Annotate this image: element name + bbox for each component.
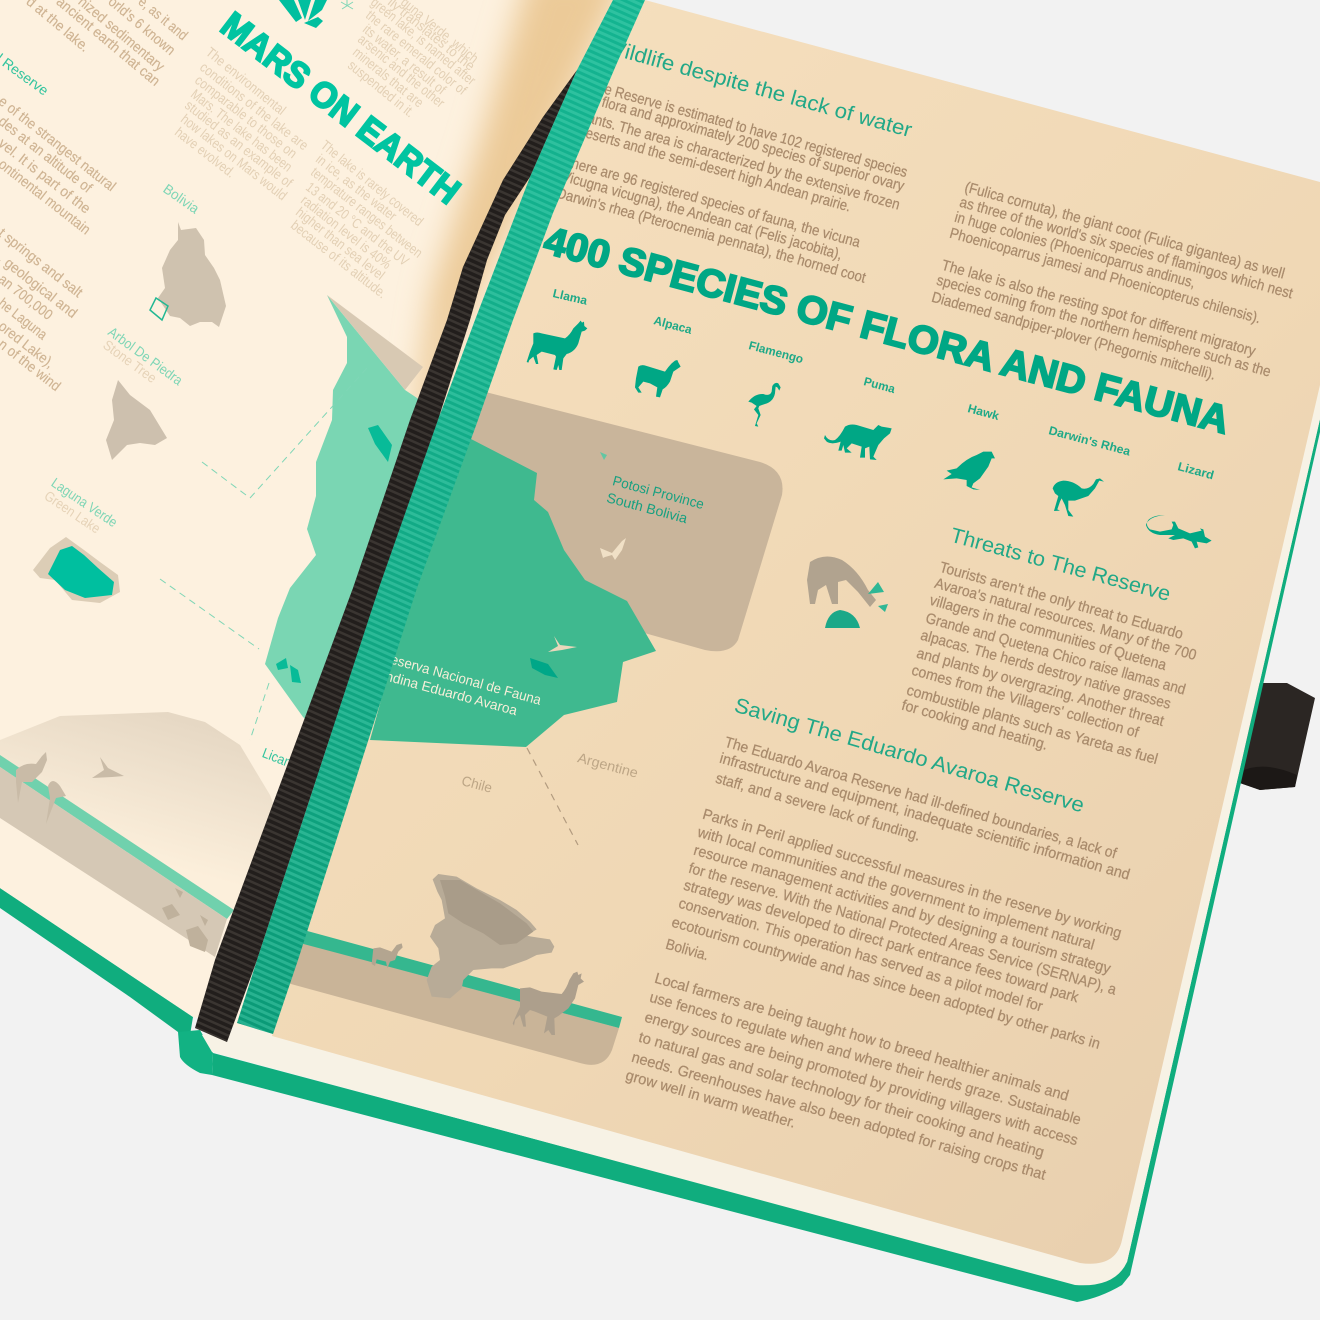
label: chile: Chile [460,772,494,796]
llama [513,972,584,1035]
stone tree [427,874,554,998]
icon: stone tree [106,380,167,460]
label: llama: Llama [551,286,589,308]
map: province light green [265,295,450,745]
label: green lake: Green Lake [42,487,104,537]
label: bolivia: Bolivia [160,180,203,217]
text block: reserve flora: Darwin's rhea (Pterocnemia pennata), the horned coot [555,185,868,287]
label: licancabur: Licancabur Volcano [260,745,369,799]
text block: reserve flora: plants. The area is characterized by the extensive frozen [576,107,902,214]
animals row [527,286,1216,548]
text block: reserve flora: (Vicugna vicugna), the Andean cat (Felis jacobita), [556,167,844,264]
tan map wedge [327,295,423,390]
front cover bottom edge [212,419,1320,1302]
text block: environmental conditions: conditions of the lake are [197,59,312,153]
black elastic band [195,70,577,1042]
scene: left landscape [0,712,290,957]
label: darwin's rhea: Darwin's Rhea [1047,423,1132,459]
left cover edge [0,888,193,1035]
label: flamengo: Flamengo [747,338,805,366]
text block: threats: villagers in the communities of Quetena [928,592,1169,674]
title: mars on earth: MARS ON EARTH [214,4,468,212]
text block: local farmers [624,970,1083,1184]
text block: threats: comes from the Villagers' collection of [910,662,1141,742]
text block: laguna verde: suspended in it. [345,57,418,120]
text block: local farmers: to natural gas and solar technology for their cooking and heating [637,1029,1046,1161]
bird [92,757,124,778]
text block: saving: infrastructure and equipment, inadequate scientific information and [718,750,1132,884]
label: reserve name: Reserva Nacional de Fauna [380,648,543,708]
text block: laguna verde: its water, a result of [360,21,449,97]
text block: laguna verde: the rare emerald color of [363,7,470,98]
scene: right landscape [280,874,622,1065]
text block: threats: Avaroa's natural resources. Many of the 700 [933,575,1198,664]
label: potosi province: Potosi Province [611,472,706,512]
text block: flamingos: Phoenicoparrus jamesi and Phoenicopterus chilensis). [948,225,1263,327]
title: 400 species: 400 SPECIES OF FLORA AND FAUNA [539,219,1234,443]
icons: puma, hawk, rhea, lizard [824,424,1212,548]
text block: parks in peril: with local communities and the government to implement natural [695,824,1096,954]
text block: local farmers: grow well in warm weather. [624,1067,798,1132]
map details: lakes [276,425,392,683]
text block: local farmers: energy sources are being promoted by providing villagers with access [643,1009,1080,1149]
label: arbol de piedra: Arbol De Piedra [105,324,186,388]
text block: local farmers: Local farmers are being taught how to breed healthier animals and [653,970,1071,1105]
map: reserve region [370,439,656,747]
elastic pen loop [1237,683,1315,790]
text block: parks in peril: ecotourism countrywide and has since been adopted by other parks in [670,914,1102,1053]
text block: threats: and plants by overgrazing. Another threat [915,645,1167,730]
text block: lake temperature: The lake is rarely covered [318,137,427,229]
dashed leader [527,748,578,845]
map panel [370,388,783,747]
text block: saving: staff, and a severe lack of funding. [714,770,922,845]
text block: threats: combustible plants such as Yareta as fuel [905,682,1160,768]
text block: threats: for cooking and heating. [900,697,1050,754]
heading: threats: Threats to The Reserve [948,524,1173,606]
text block: lake temperature: radiation level is 40% [298,192,395,272]
label: potosi province: South Bolivia [605,489,689,526]
text block: parks in peril: conservation. This operation has served as a pilot model for [677,895,1045,1015]
map: laguna verde [33,537,120,603]
text block: environmental conditions: how lakes on Mars would [178,111,290,203]
text block: environmental conditions [172,44,312,203]
text block: threats: Grande and Quetena Chico raise llamas and [924,610,1187,699]
text block: parks in peril: Bolivia. [664,936,711,964]
label: laguna verde: Laguna Verde [49,474,121,530]
text block: reserve flora: There are 96 registered species of fauna, the vicuna [562,153,863,251]
text block: environmental conditions: The environmental [203,44,289,118]
flamingos [16,752,66,824]
text block: local farmers: needs. Greenhouses have also been adopted for raising crops that [630,1049,1048,1184]
text block: flamingos [930,179,1295,384]
locator square [150,298,168,320]
text block: threats [900,559,1198,768]
text block: lake temperature: 13 and 20 °C and the UV [303,179,413,269]
text block: threats: alpacas. The herds destroy native grasses [919,627,1173,713]
text block: environmental conditions: Mars. The lake has been [188,86,296,175]
text block: reserve flora: deserts and the semi-desert high Andean prairie. [577,123,853,215]
cover hinge [178,1030,213,1075]
label: stone tree: Stone Tree [100,337,160,386]
rock shading [440,880,533,945]
page block [202,385,1320,1285]
text block: threats: Tourists aren't the only threat to Eduardo [938,559,1185,643]
text block: parks in peril: strategy was developed to direct park entrance fees toward park [682,877,1081,1006]
label: puma: Puma [862,374,897,396]
text block: environmental conditions: comparable to those on [192,72,300,161]
label: argentine: Argentine [576,749,640,781]
text block: flamingos: in huge colonies (Phoenicoparrus andinus, [953,209,1197,292]
label: potosi province [605,472,706,526]
text block: parks in peril: Parks in Peril applied successful measures in the reserve by working [701,806,1123,942]
text block: flamingos: Diademed sandpiper-plover (Phegornis mitchelli). [930,289,1218,384]
text block: saving: The Eduardo Avaroa Reserve had ill-defined boundaries, a lack of [723,734,1119,863]
heading: wildlife: Wildlife despite the lack of water [602,35,915,142]
text block: parks in peril [664,806,1123,1053]
label: lizard: Lizard [1176,459,1216,482]
stones [162,888,208,952]
text block: reserve flora: of flora and approximately 200 species of superior ovary [586,90,906,195]
icon: grazing llama [807,556,888,628]
text block: lake temperature: because of its altitude. [288,217,390,301]
heading: saving: Saving The Eduardo Avaroa Reserve [732,694,1087,817]
icon: crystal [279,0,353,28]
text block: reserve flora: The Reserve is estimated to have 102 registered species [588,77,909,181]
lakes and birds on map [530,658,558,678]
text block: parks in peril: resource management activities and by designing a tourism strategy [692,842,1113,978]
body text: left column [0,0,190,395]
label: hawk: Hawk [966,401,1001,423]
text block: laguna verde: arsenic and the other [355,31,448,111]
text block: lake temperature: temprature ranges between [308,164,426,261]
map: bolivia [158,222,226,327]
text block: flamingos: species coming from the northern hemisphere such as the [935,272,1273,381]
label: alpaca: Alpaca [652,313,694,337]
text block: flamingos: (Fulica cornuta), the giant coot (Fulica gigantea) as well [963,179,1287,283]
text block: lake temperature: higher than sea level [293,204,388,283]
text block: flamingos: The lake is also the resting spot for different migratory [940,257,1258,360]
text block: lake temperature [288,137,427,301]
text block: environmental conditions: studied as an example of [182,97,296,191]
label: reserve name: Andina Eduardo Avaroa [375,665,519,718]
text block: environmental conditions: have evolved. [172,124,239,181]
text block: reserve flora [555,77,909,287]
icons: llama, alpaca, flamingo [527,321,781,427]
text block: lake temperature: in ice, as the water [313,151,400,224]
dashed leader lines [160,368,367,740]
panel: right page [272,0,1320,1264]
small llama [372,943,403,968]
text block: local farmers: use fences to regulate when and where their herds graze. Sustainable [648,989,1083,1129]
panel: left page [0,0,630,1030]
green ribbon bookmark [237,0,645,1034]
text block: parks in peril: for the reserve. With the National Protected Areas Service (SERNAP), a [687,860,1119,999]
text block: laguna verde: minerals that are [350,44,427,110]
